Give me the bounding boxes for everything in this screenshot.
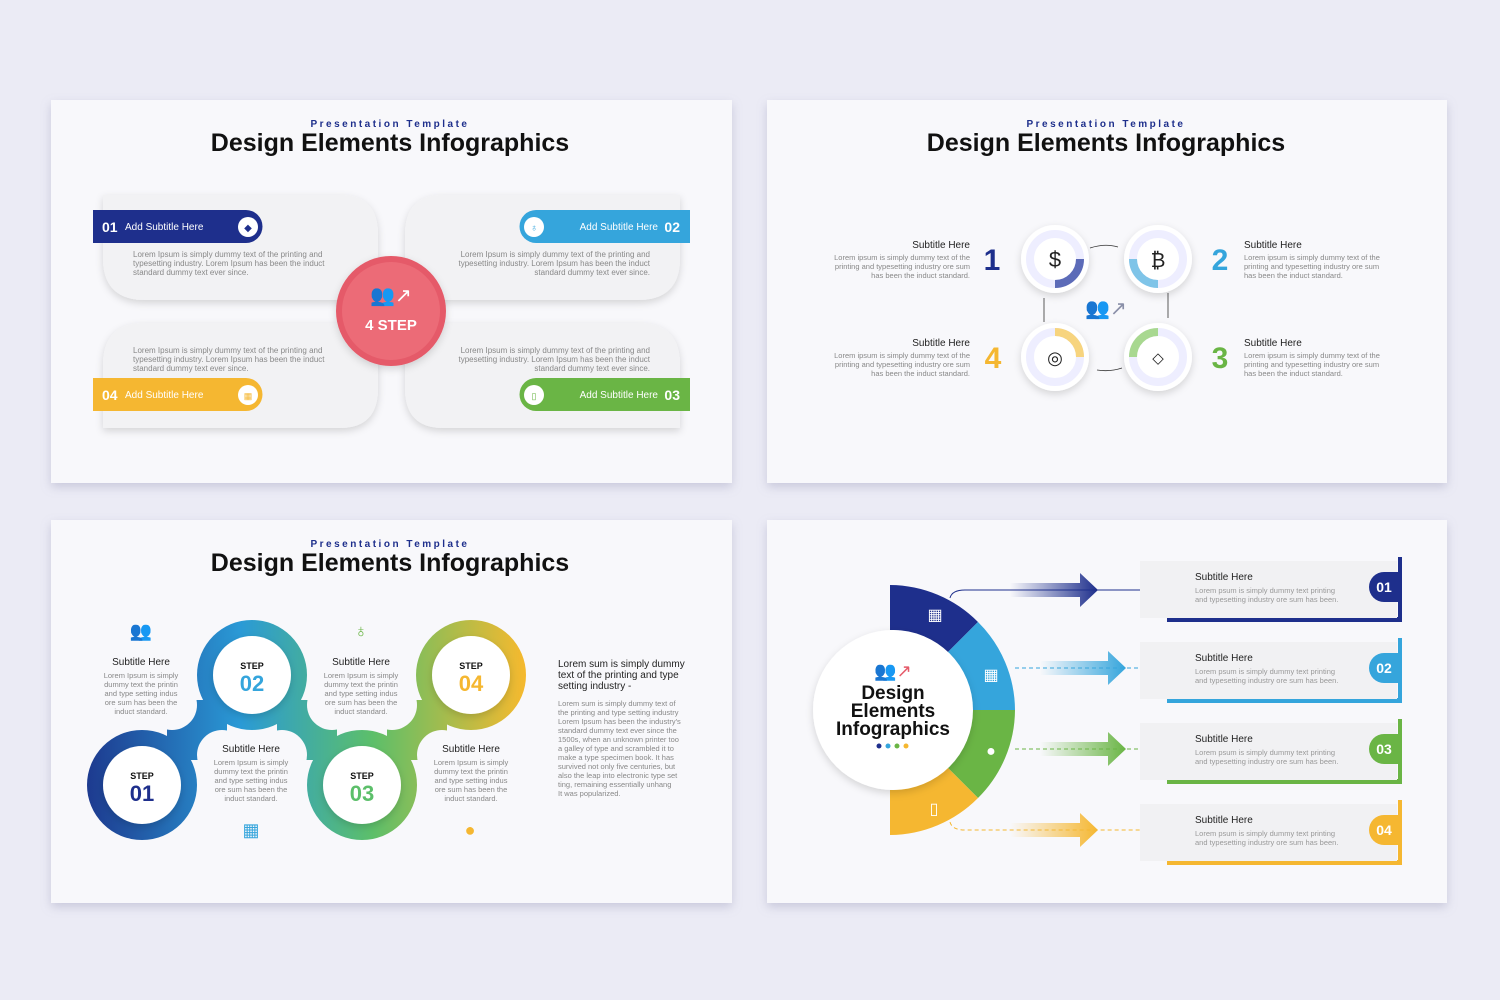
banner 02: 02 [664,219,680,235]
panel: half ring: 03 [1376,741,1392,757]
side paragraph: Lorem sum is simply dummy [558,659,685,670]
circle 4 [1021,323,1089,391]
step texts: and type setting indus [435,776,508,785]
panel: half ring: 04 [1376,822,1392,838]
cards: 01 [1376,579,1392,595]
side paragraph: Lorem sum is simply dummy text of [558,699,676,708]
body texts: typesetting industry. Lorem Ipsum has been the induct [133,259,325,268]
cards [1140,557,1402,622]
step texts: Subtitle Here [442,744,500,755]
text blocks: has been the induct standard. [871,271,970,280]
step texts: and type setting indus [325,689,398,698]
text blocks: printing and typesetting industry ore sum [1244,360,1379,369]
panel: half ring: 02 [1376,660,1392,676]
center circle: 4 step: 👥↗ [370,285,412,307]
side paragraph: a galley of type and scrambled it to [558,744,674,753]
step texts: and type setting indus [105,689,178,698]
center circle: 4 step [336,256,446,366]
arrows [950,573,1161,847]
ring segments: ▦ [927,607,943,624]
center circle title: Infographics [836,719,950,740]
step texts: dummy text the printin [434,767,508,776]
body texts: typesetting industry. Lorem Ipsum has been the induct [133,355,325,364]
text blocks: Lorem ipsum is simply dummy text of the [834,253,970,262]
panel: half ring: Subtitle Here [1195,734,1253,745]
body texts [133,250,651,373]
banner 01: 01 [102,219,118,235]
step texts: Lorem Ipsum is simply [324,671,399,680]
body texts: standard dummy text ever since. [534,364,650,373]
step texts: ore sum has been the [105,698,177,707]
banner 02 [520,210,690,243]
center circle title: 👥↗ [874,661,912,681]
panel: half ring: Lorem psum is simply dummy text printing [1195,829,1335,838]
heading: bottom-left: Design Elements Infographics [211,549,569,577]
step circles: STEP [459,661,483,671]
side paragraph: It was popularized. [558,789,621,798]
side paragraph: standard dummy text ever since the [558,726,677,735]
step circles: STEP [350,771,374,781]
numbers: 3 [1212,342,1228,375]
step texts: induct standard. [444,794,498,803]
circle 1: $ [1049,247,1061,272]
step circles: STEP [130,771,154,781]
step circles: 03 [350,781,374,806]
panel: half ring: Subtitle Here [1195,815,1253,826]
text blocks: Subtitle Here [1244,240,1302,251]
panel: half ring: Lorem psum is simply dummy text printing [1195,667,1335,676]
panel: half ring: Subtitle Here [1195,653,1253,664]
panel: snake steps [51,520,732,903]
step circles: 01 [130,781,154,806]
text blocks: has been the induct standard. [871,369,970,378]
panel: half ring [767,520,1447,903]
text blocks: Lorem ipsum is simply dummy text of the [834,351,970,360]
cards: Lorem psum is simply dummy text printing [1195,586,1335,595]
step texts: dummy text the printin [104,680,178,689]
circle 2: ₿ [1151,250,1165,272]
text blocks: printing and typesetting industry ore sum [835,360,970,369]
cards: and typesetting industry ore sum has been. [1195,595,1338,604]
body texts: typesetting industry. Lorem Ipsum has been the induct [458,355,651,364]
connectors [1044,245,1168,371]
numbers: 2 [1212,244,1228,277]
side paragraph: ting, remaining essentially unhang [558,780,671,789]
center circle: 4 step: 4 STEP [365,317,417,334]
body texts: standard dummy text ever since. [534,268,650,277]
step texts: induct standard. [224,794,278,803]
cards: Subtitle Here [1195,572,1253,583]
side paragraph: 1500s, when an unknown printer too [558,735,679,744]
body texts: typesetting industry. Lorem Ipsum has been the induct [458,259,651,268]
text blocks: printing and typesetting industry ore sum [1244,262,1379,271]
side paragraph: make a type specimen book. It has [558,753,674,762]
step texts: dummy text the printin [214,767,288,776]
step texts: and type setting indus [215,776,288,785]
ring segments [890,585,1015,835]
step circles: 02 [240,671,264,696]
step circles [103,636,510,824]
banner 04: ▦ [244,391,252,401]
side paragraph: also the leap into electronic type set [558,771,678,780]
icons: ♁ [354,621,368,641]
cards background [103,195,680,428]
step texts: Lorem Ipsum is simply [214,758,289,767]
step texts: Lorem Ipsum is simply [434,758,509,767]
side paragraph: Lorem Ipsum has been the industry's [558,717,681,726]
panel: 4 step [51,100,732,483]
icons: ▦ [242,820,260,840]
panel: circles cycle [767,100,1447,483]
text blocks: printing and typesetting industry ore sum [835,262,970,271]
body texts: standard dummy text ever since. [133,364,249,373]
step texts: Subtitle Here [112,657,170,668]
panel: half ring: and typesetting industry ore sum has been. [1195,838,1338,847]
banner 03: Add Subtitle Here [580,390,658,401]
step circles: STEP [240,661,264,671]
panel: half ring: and typesetting industry ore sum has been. [1195,757,1338,766]
side paragraph: setting industry - [558,681,631,692]
banner 04: 04 [102,387,118,403]
panel: half ring: and typesetting industry ore sum has been. [1195,676,1338,685]
heading: bottom-left: Presentation Template [310,539,470,550]
circle 3 [1124,323,1192,391]
text blocks: Subtitle Here [1244,338,1302,349]
banner 01: Add Subtitle Here [125,222,204,233]
body texts: Lorem Ipsum is simply dummy text of the printing and [461,250,650,259]
numbers: 4 [985,342,1002,375]
numbers: 1 [984,244,1000,277]
ring segments: ▦ [983,667,999,684]
step texts: Lorem Ipsum is simply [104,671,179,680]
numbers [984,244,1228,375]
banner 03: 03 [664,387,680,403]
banner 04 [93,378,262,411]
side paragraph: survived not only five centuries, but [558,762,676,771]
text blocks: has been the induct standard. [1244,271,1343,280]
step circles: 04 [459,671,484,696]
step texts: dummy text the printin [324,680,398,689]
icons: ● [465,820,475,840]
text blocks: has been the induct standard. [1244,369,1343,378]
step texts: induct standard. [334,707,388,716]
center circle title [813,630,973,790]
step texts: Subtitle Here [332,657,390,668]
circle 3: ◇ [1152,350,1164,367]
body texts: Lorem Ipsum is simply dummy text of the printing and [461,346,650,355]
heading: top-right: Presentation Template [1026,119,1186,130]
ring segments: ● [986,743,996,760]
text blocks: Subtitle Here [912,338,970,349]
text blocks [834,240,1380,378]
banner 03: ▯ [532,391,537,401]
banner 01 [93,210,262,243]
circle 4: ◎ [1047,348,1063,368]
banner 03 [520,378,690,411]
text blocks: Lorem ipsum is simply dummy text of the [1244,253,1380,262]
step texts [104,657,509,803]
body texts: Lorem Ipsum is simply dummy text of the printing and [133,250,322,259]
icons [130,621,475,840]
heading: top-right: Design Elements Infographics [927,129,1285,157]
step texts: induct standard. [114,707,168,716]
snake ribbon [87,620,526,840]
side paragraph: text of the printing and type [558,670,679,681]
banner 02: Add Subtitle Here [580,222,658,233]
center circle title: Design [861,683,925,704]
icon: center team: 👥↗ [1085,298,1127,320]
text blocks: Subtitle Here [912,240,970,251]
circle 1 [1021,225,1089,293]
heading: top-left: Presentation Template [310,119,470,130]
banner 04: Add Subtitle Here [125,390,204,401]
text blocks: Lorem ipsum is simply dummy text of the [1244,351,1380,360]
step texts: Subtitle Here [222,744,280,755]
banner 01: ◆ [244,223,252,234]
banner 02: ♁ [530,223,538,234]
step texts: ore sum has been the [435,785,507,794]
body texts: standard dummy text ever since. [133,268,249,277]
body texts: Lorem Ipsum is simply dummy text of the printing and [133,346,322,355]
step texts: ore sum has been the [215,785,287,794]
panel: half ring: Lorem psum is simply dummy text printing [1195,748,1335,757]
ring segments: ▯ [930,801,938,818]
circle 2 [1124,225,1192,293]
side paragraph [558,659,685,798]
heading: top-left: Design Elements Infographics [211,129,569,157]
side paragraph: the printing and type setting industry [558,708,679,717]
step texts: ore sum has been the [325,698,397,707]
center circle title: Elements [851,701,935,722]
icons: 👥 [130,621,152,641]
